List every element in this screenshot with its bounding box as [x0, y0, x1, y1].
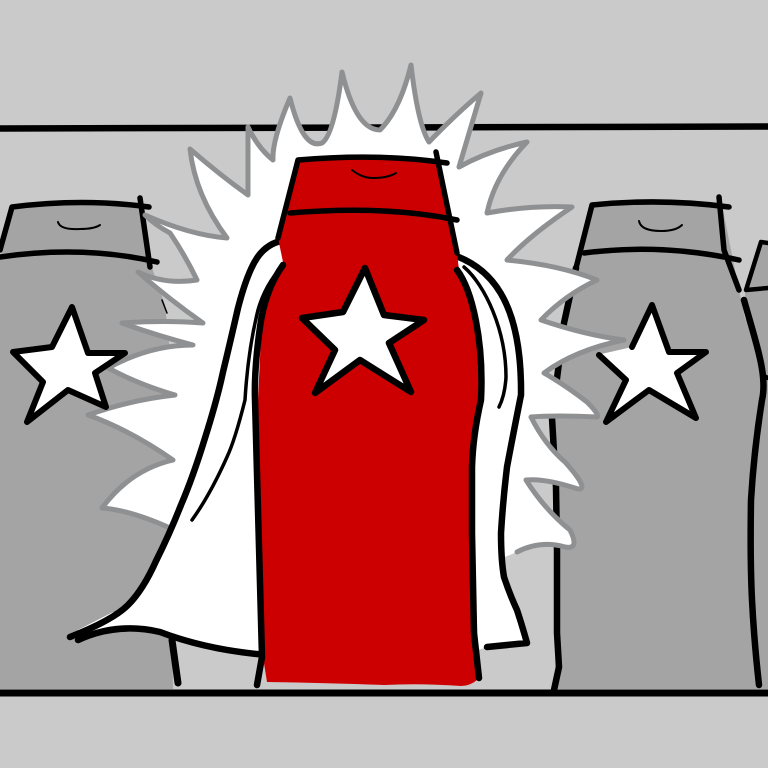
left bottle star: [13, 307, 125, 422]
right grey bottle: [552, 197, 764, 690]
left grey bottle: [0, 198, 178, 689]
right bottle star: [597, 305, 706, 422]
hero cape: [70, 240, 527, 655]
burst glow: [88, 65, 624, 600]
shelf: [0, 126, 768, 693]
hero red bottle: [255, 152, 481, 686]
far right grey bottle: [745, 242, 768, 689]
hero star: [302, 268, 424, 393]
